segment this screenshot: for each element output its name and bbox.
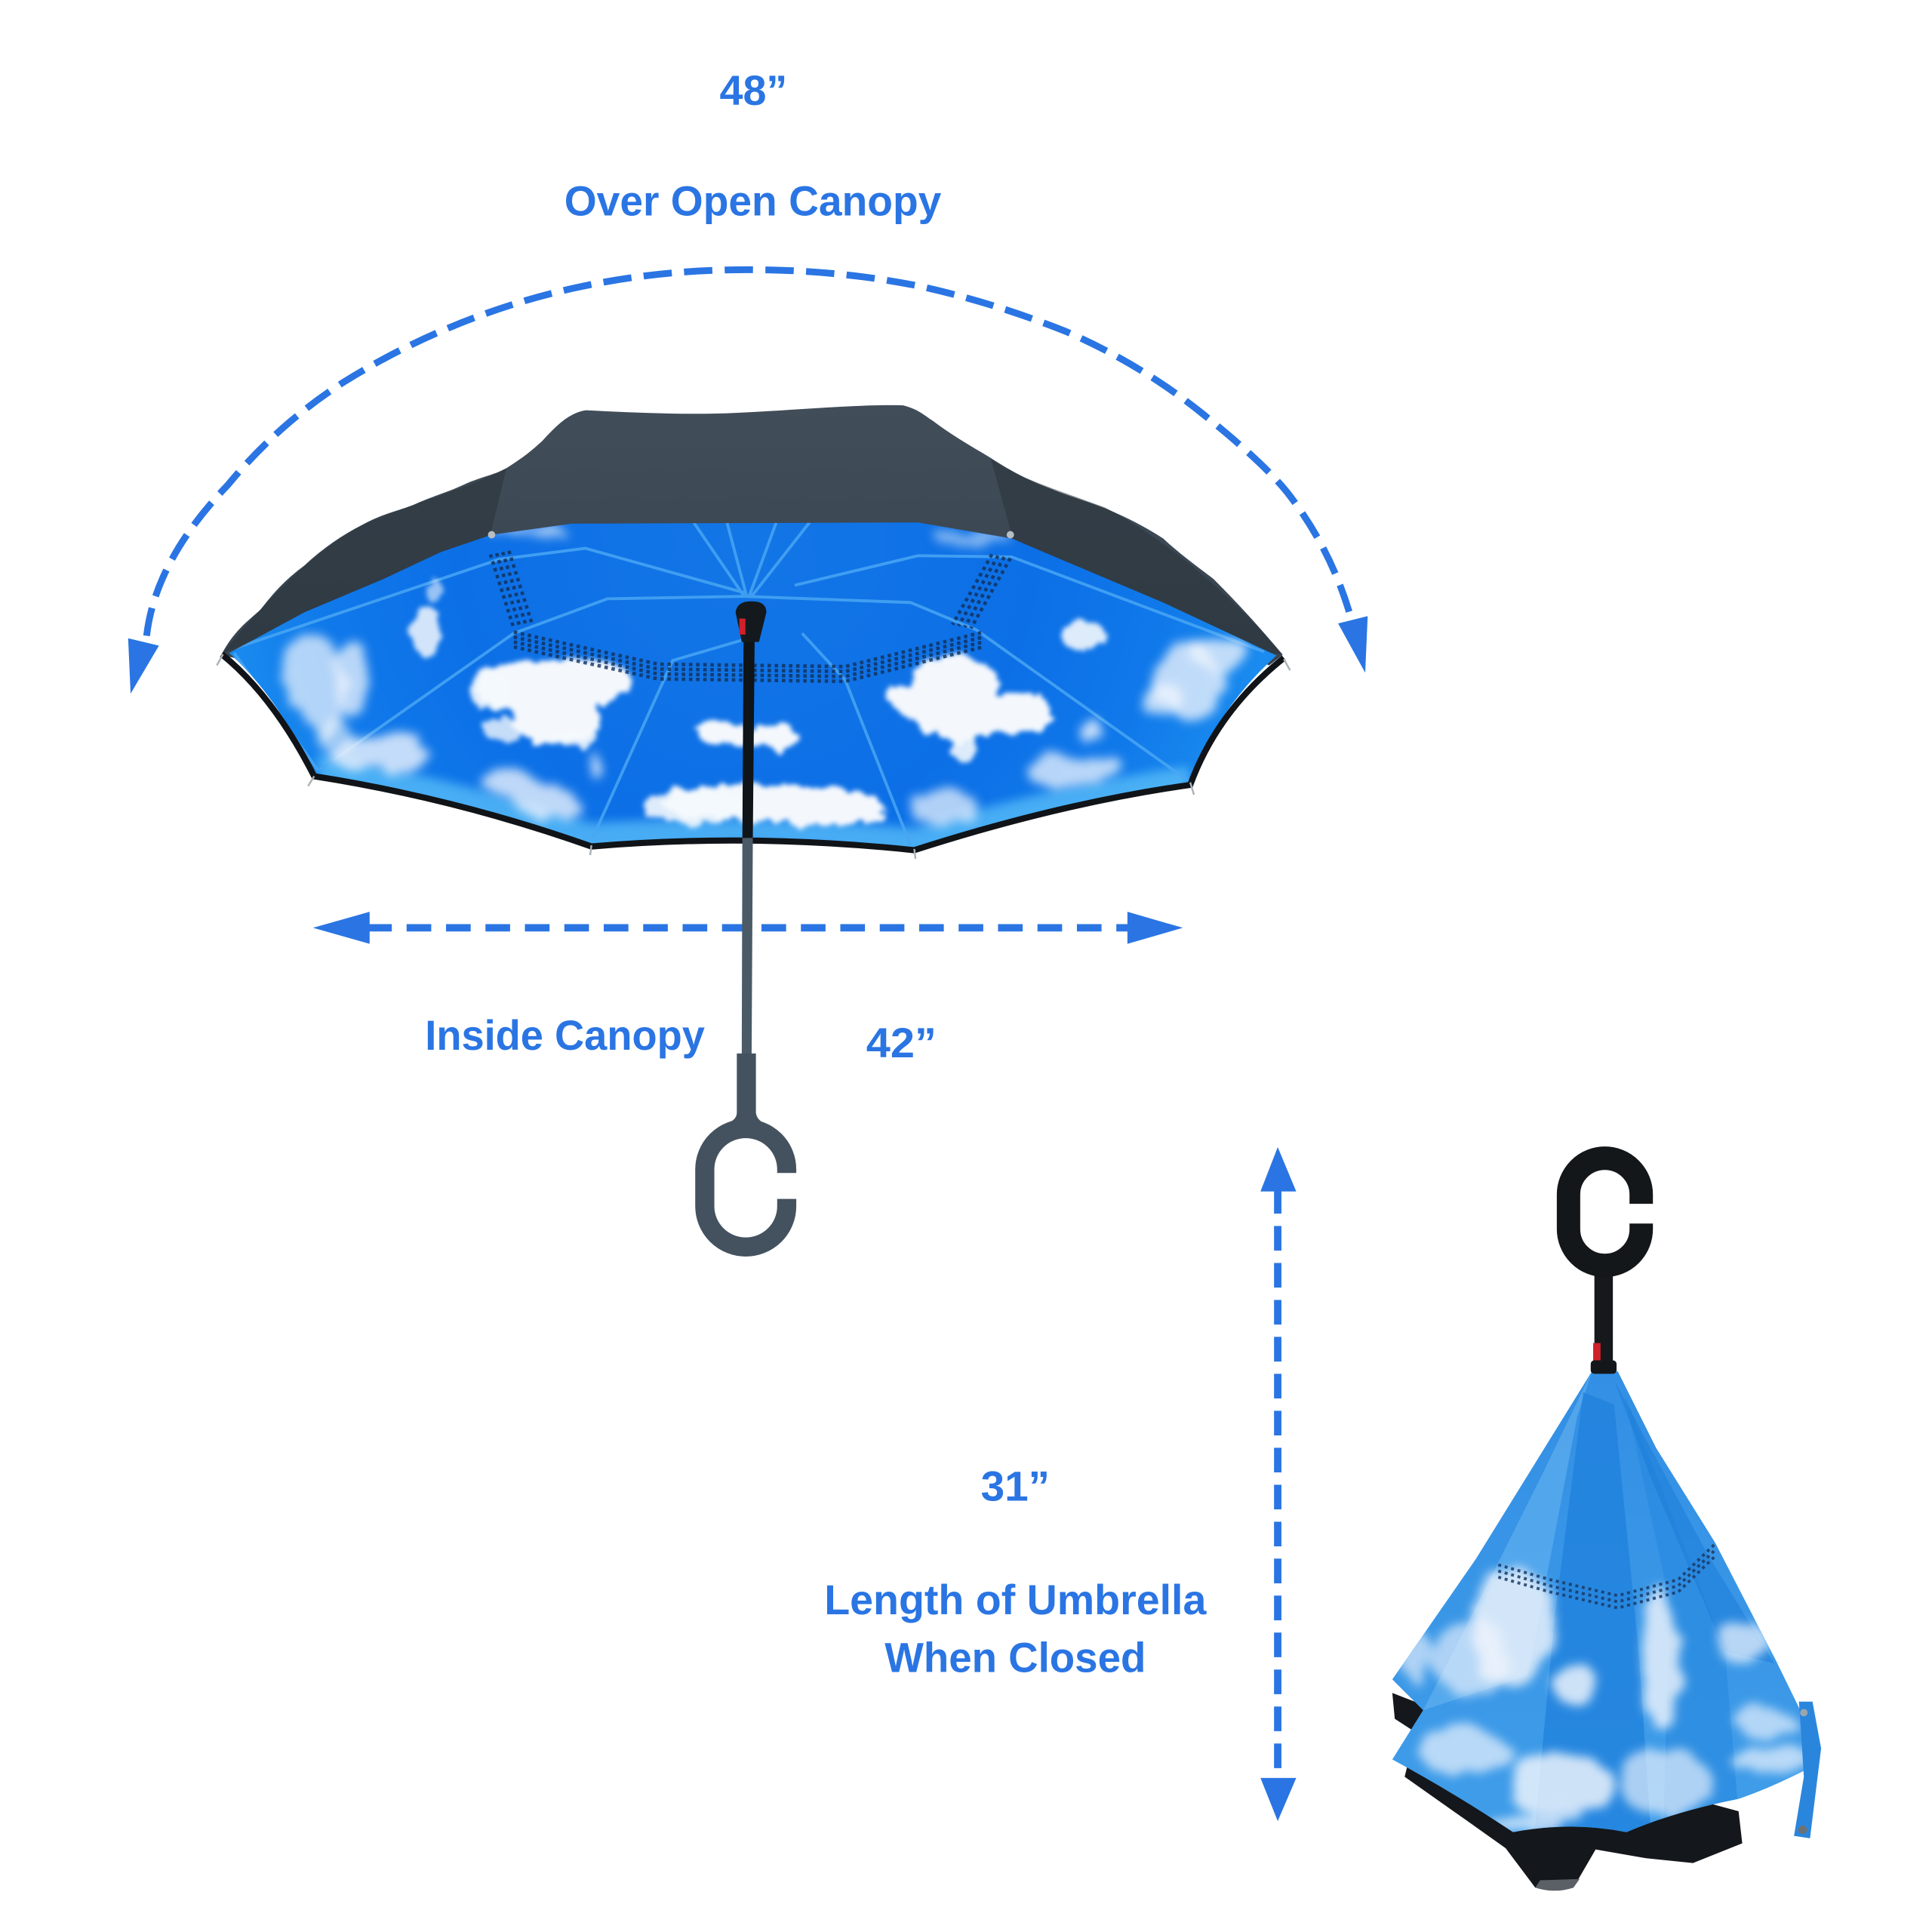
shaft — [1595, 1273, 1613, 1371]
label: 48 inch: 48” — [719, 67, 787, 114]
perforated band — [1498, 1543, 1716, 1608]
clouds — [1397, 1564, 1806, 1831]
sky interior — [229, 522, 1276, 857]
label: 31 inch: 31” — [981, 1463, 1050, 1510]
arrow: over canopy arc — [128, 269, 1367, 694]
label: Length of Umbrella When Closed — [824, 1577, 1207, 1681]
label: Length of Umbrella When Closed: When Closed — [884, 1635, 1146, 1681]
clouds — [409, 579, 1106, 826]
arrow: closed length — [1260, 1147, 1297, 1821]
lighter rim — [318, 754, 1189, 857]
label: Length of Umbrella When Closed: Length of Umbrella — [824, 1577, 1207, 1623]
perforated band — [491, 551, 1011, 681]
label: Over Open Canopy: Over Open Canopy — [565, 178, 941, 225]
ribs — [234, 522, 1264, 845]
black outer canopy — [221, 405, 1283, 666]
label: Inside Canopy: Inside Canopy — [425, 1012, 705, 1059]
black scalloped hem — [222, 654, 1284, 851]
illustration: open umbrella — [217, 405, 1290, 859]
canopy side shading — [222, 458, 1283, 654]
black lining — [1392, 1693, 1743, 1887]
rib tips — [217, 654, 1290, 859]
strap — [1794, 1702, 1821, 1838]
C handle — [1568, 1158, 1641, 1266]
umbrella shaft and C handle — [705, 601, 786, 1247]
illustration: closed umbrella — [1392, 1158, 1821, 1890]
blue canopy — [1392, 1371, 1814, 1836]
label: 42 inch: 42” — [866, 1020, 937, 1066]
arrow: inside canopy width — [313, 912, 1183, 944]
fold shading — [1423, 1371, 1592, 1710]
